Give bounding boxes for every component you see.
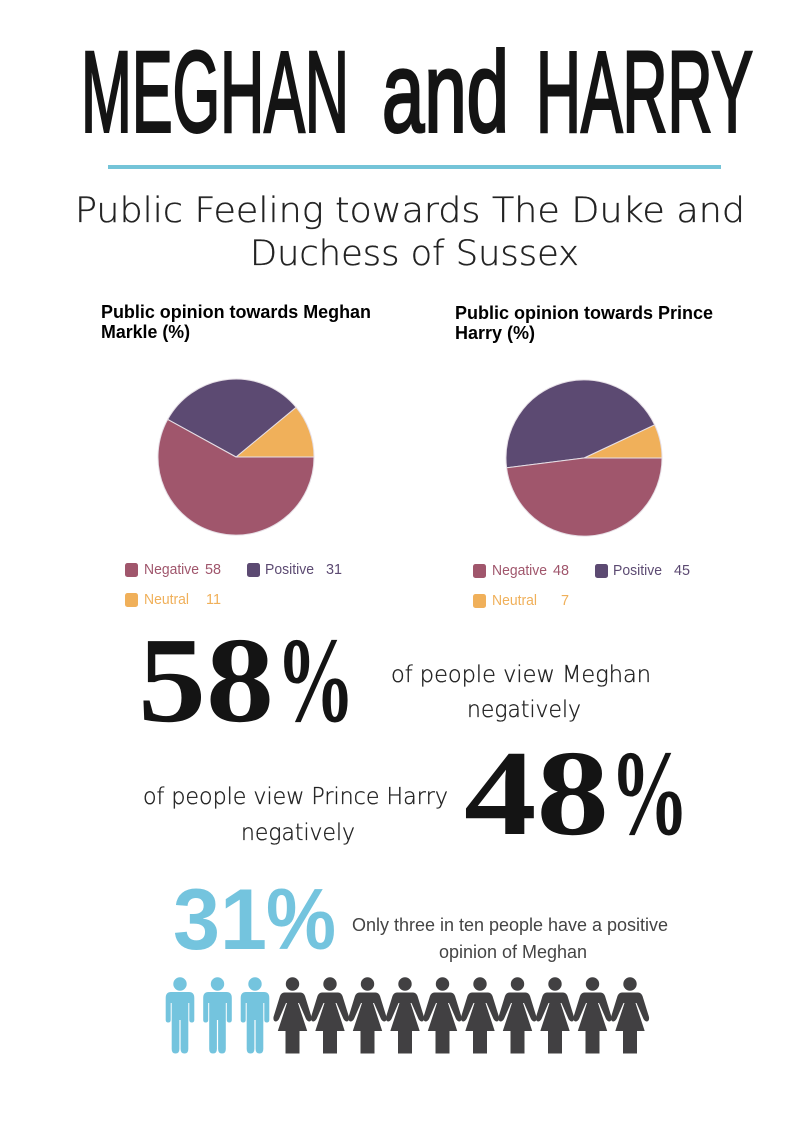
pictogram: three in ten people xyxy=(166,977,649,1054)
stat text: Harry negative: of people view Prince Harry xyxy=(143,782,448,810)
stat: 48%: 48 xyxy=(464,726,609,861)
legend: Harry: Neutral xyxy=(492,592,537,609)
panel: Meghan opinion chart xyxy=(101,302,371,608)
legend: Meghan: 58 xyxy=(205,561,221,578)
chart heading: Harry xyxy=(455,303,713,343)
stat: 31%: 31 xyxy=(173,872,267,968)
subtitle: Public Feeling towards The Duke and xyxy=(75,191,745,231)
stat text: Harry negative xyxy=(143,782,448,846)
title: and xyxy=(382,30,509,156)
stat: 48%: % xyxy=(610,726,689,861)
legend: Meghan: Positive xyxy=(265,561,314,578)
stat: 31%: % xyxy=(266,872,336,968)
stat text: Meghan negative: of people view Meghan xyxy=(391,660,651,688)
chart heading: Meghan: Public opinion towards Meghan xyxy=(101,302,371,322)
icons: positive men xyxy=(166,977,269,1054)
stat: 58%: % xyxy=(276,613,355,748)
stat text: Meghan negative xyxy=(391,660,651,723)
stat: 58%: 58 xyxy=(138,613,274,748)
legend: Harry xyxy=(473,562,690,609)
stat: 58% xyxy=(138,613,355,748)
chart heading: Meghan: Markle (%) xyxy=(101,322,190,342)
pie chart: Meghan xyxy=(158,379,314,535)
legend: Meghan: 31 xyxy=(326,561,342,578)
icons: remaining women xyxy=(273,977,649,1054)
stat text: three in ten: Only three in ten people have a positive xyxy=(352,915,668,935)
stat: 31% xyxy=(173,872,336,968)
legend: Harry: Negative xyxy=(492,562,547,579)
stat text: Harry negative: negatively xyxy=(241,818,355,846)
legend: Meghan xyxy=(125,561,342,608)
stat text: Meghan negative: negatively xyxy=(467,695,581,723)
legend: Harry: 45 xyxy=(674,562,690,579)
stat text: three in ten: opinion of Meghan xyxy=(439,942,587,962)
chart heading: Harry: Harry (%) xyxy=(455,323,535,343)
legend: Harry: 7 xyxy=(561,592,569,609)
pie chart: Harry xyxy=(506,380,662,536)
legend: Meghan: Neutral xyxy=(144,591,189,608)
legend: Meghan: 11 xyxy=(206,591,221,608)
subtitle: Duchess of Sussex xyxy=(250,234,579,274)
title: MEGHAN xyxy=(81,28,349,156)
legend: Meghan: Negative xyxy=(144,561,199,578)
stat text: three in ten xyxy=(352,915,668,962)
stat: 48% xyxy=(464,726,689,861)
legend: Harry: Positive xyxy=(613,562,662,579)
subtitle xyxy=(75,191,745,274)
panel: Harry opinion chart xyxy=(455,303,713,609)
chart heading: Harry: Public opinion towards Prince xyxy=(455,303,713,323)
legend: Harry: 48 xyxy=(553,562,569,579)
divider rule xyxy=(108,165,721,169)
chart heading: Meghan xyxy=(101,302,371,342)
